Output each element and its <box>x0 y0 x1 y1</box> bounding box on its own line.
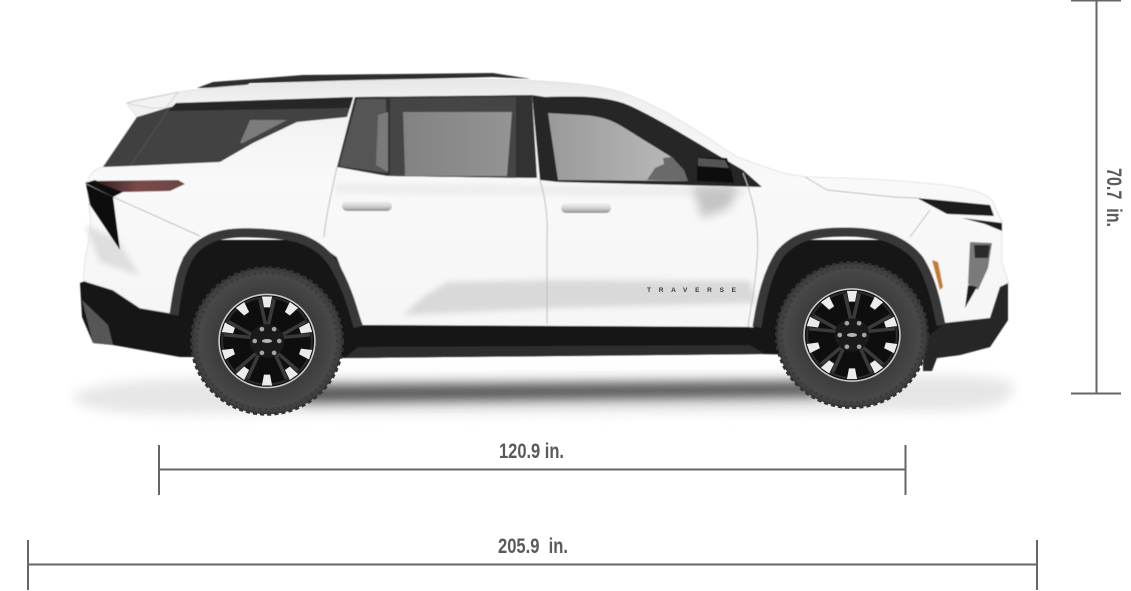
rear spoiler <box>127 92 178 108</box>
body shell <box>83 79 1009 327</box>
door seams <box>113 167 930 327</box>
dimension: overall length: 205.9 in. <box>498 535 568 558</box>
rear quarter and hatch glass <box>103 97 353 167</box>
body surface shading <box>85 183 756 315</box>
side sill panel <box>363 325 750 347</box>
dimension: wheelbase: 120.9 in. <box>499 440 564 463</box>
sill lower strip <box>345 345 765 358</box>
rear door glass <box>337 95 537 178</box>
wheel arch flares <box>174 232 941 327</box>
model badge: TRAVERSE <box>647 287 737 294</box>
front wheel <box>777 262 927 408</box>
front door glass and frame <box>532 95 762 187</box>
mirror cast shadow <box>692 186 738 218</box>
ground shadow <box>73 375 1013 414</box>
amber side marker <box>932 260 943 290</box>
door handles <box>342 201 611 213</box>
headlight <box>917 198 1002 231</box>
tail lamp and black blade <box>85 180 185 250</box>
roof rail <box>197 73 531 88</box>
lower dark underbody <box>80 240 1008 358</box>
side mirror <box>697 157 734 183</box>
rear wheel <box>192 268 342 414</box>
front bumper trim <box>923 283 1008 371</box>
rear bumper lower panel <box>82 300 113 345</box>
dimension: overall height: 70.7 in. <box>1102 168 1125 227</box>
front fascia intake <box>965 242 992 308</box>
vehicle: white SUV side view <box>80 73 1009 414</box>
